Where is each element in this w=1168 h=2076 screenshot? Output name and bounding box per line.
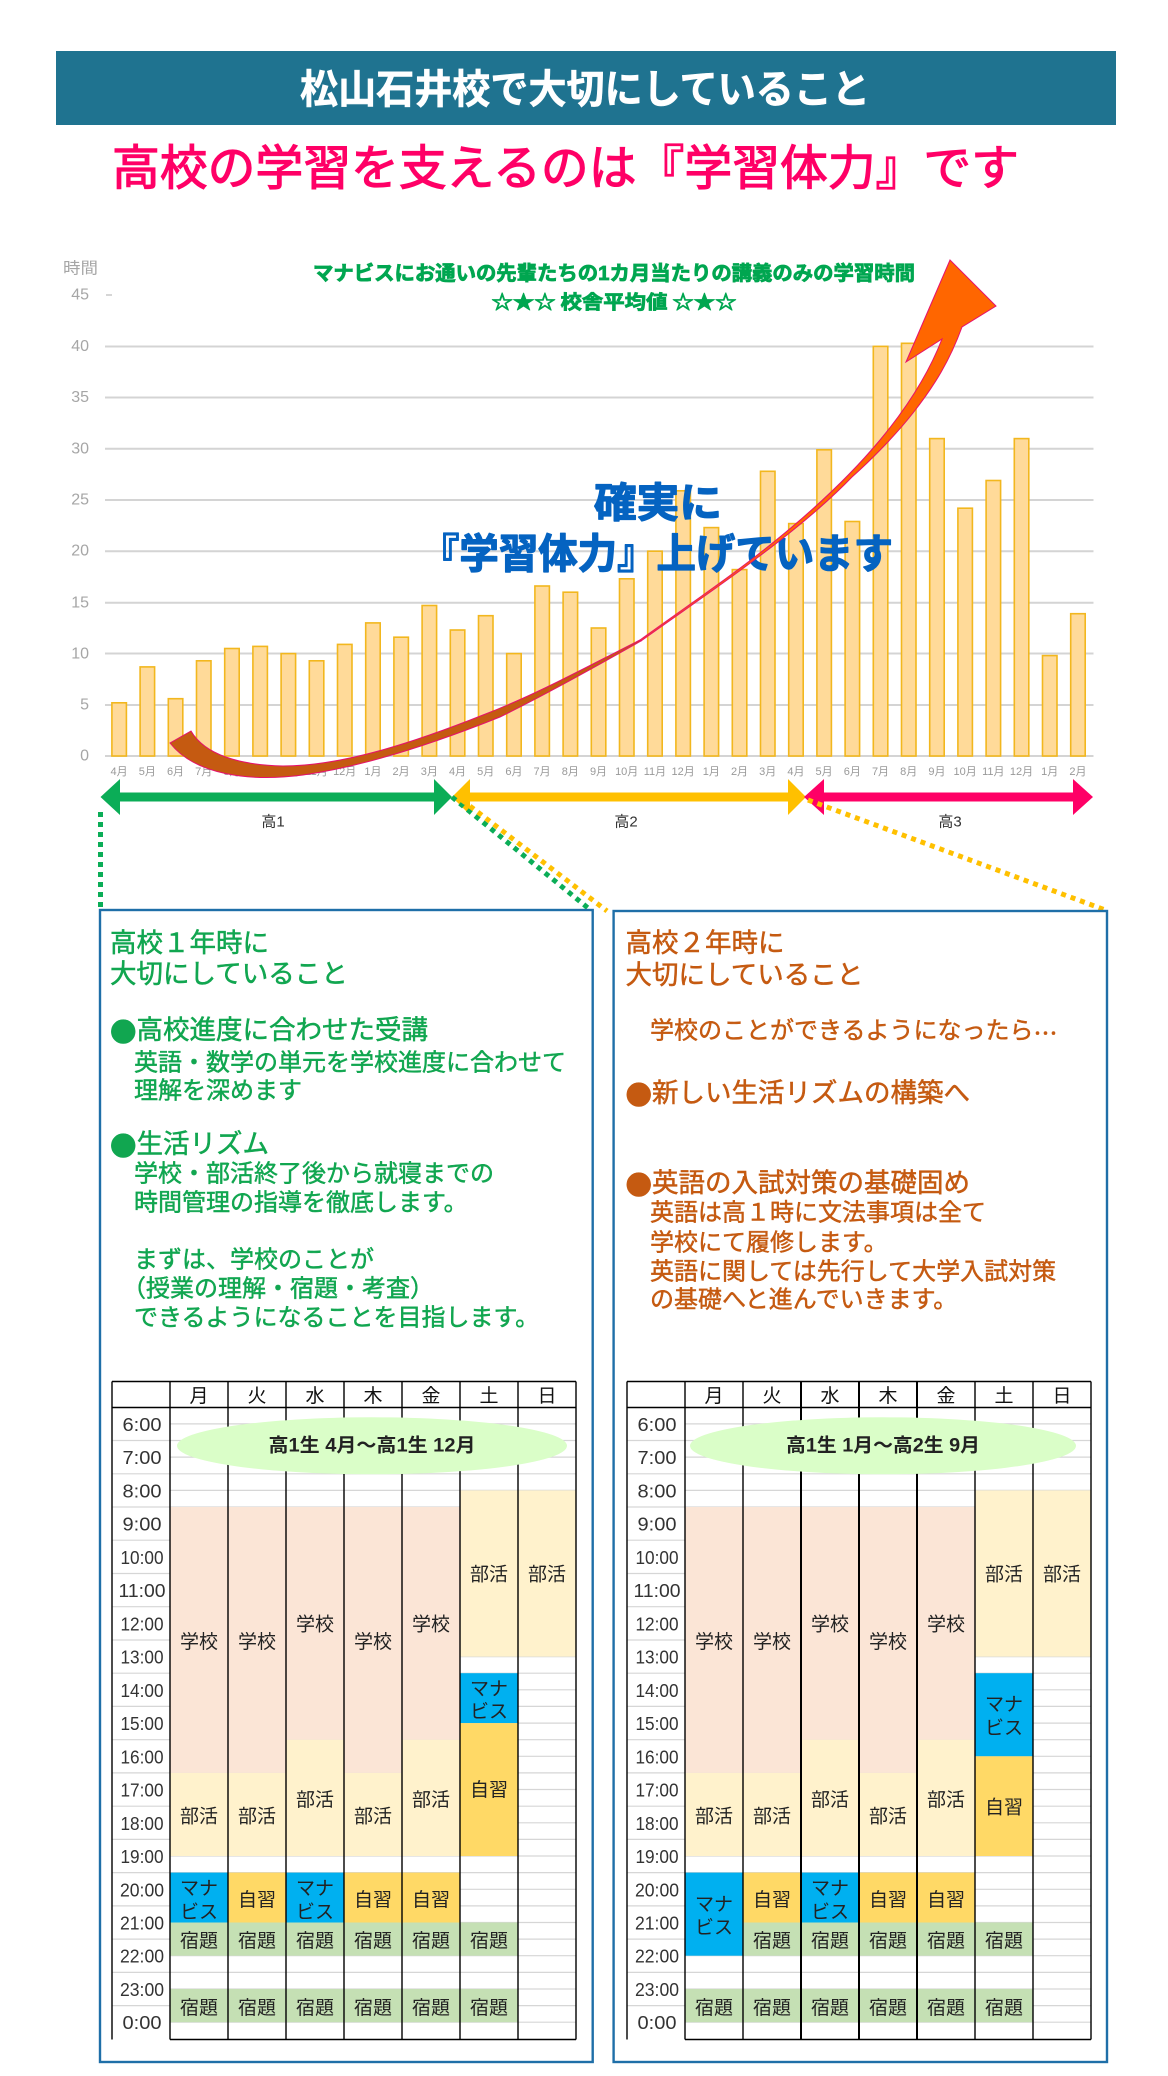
text block: 英語の入試対策の基礎固め: の基礎へと進んでいきます。 bbox=[650, 1286, 957, 1314]
month labels: 1月 bbox=[1041, 766, 1058, 778]
time labels: 0:00 bbox=[638, 2013, 676, 2033]
time labels: 19:00 bbox=[120, 1847, 164, 1867]
weekday header: 土 bbox=[994, 1385, 1014, 1407]
text block: first goal: まずは、学校のことが bbox=[134, 1246, 374, 1274]
schedule labels: 学校 bbox=[695, 1631, 733, 1653]
arrow: 高2 period: 高2 bbox=[614, 814, 638, 830]
time labels: 21:00 bbox=[635, 1914, 679, 1934]
month labels: 3月 bbox=[421, 766, 438, 778]
schedule labels: 部活 bbox=[238, 1806, 276, 1828]
chart title: ☆★☆ 校舎平均値 ☆★☆ bbox=[492, 288, 736, 314]
month labels: 1月 bbox=[364, 766, 381, 778]
weekday header: 日 bbox=[537, 1386, 557, 1407]
time labels: 16:00 bbox=[636, 1747, 678, 1767]
text block: 英語の入試対策の基礎固め: 英語に関しては先行して大学入試対策 bbox=[650, 1258, 1056, 1286]
text block: 生活リズム: 時間管理の指導を徹底します。 bbox=[134, 1190, 468, 1216]
text block: 英語の入試対策の基礎固め: 学校にて履修します。 bbox=[650, 1230, 888, 1256]
text block: first goal: （授業の理解・宿題・考査） bbox=[122, 1276, 434, 1302]
schedule labels: 宿題 bbox=[811, 1930, 849, 1952]
y axis labels: 10 bbox=[71, 646, 89, 662]
weekday header bbox=[189, 1385, 557, 1407]
month labels: 12月 bbox=[1010, 766, 1033, 778]
time labels bbox=[634, 1415, 680, 2033]
month labels: 9月 bbox=[928, 766, 945, 778]
time labels: 7:00 bbox=[638, 1448, 676, 1468]
month labels: 8月 bbox=[223, 766, 240, 778]
schedule labels: 部活 bbox=[412, 1789, 450, 1811]
time labels: 8:00 bbox=[122, 1481, 162, 1501]
time labels: 6:00 bbox=[638, 1415, 676, 1435]
schedule labels: 宿題 bbox=[927, 1930, 965, 1952]
schedule labels: 宿題 bbox=[927, 1997, 965, 2019]
callout: growth message bbox=[420, 480, 893, 577]
schedule labels: 部活 bbox=[354, 1806, 392, 1828]
schedule labels: 学校 bbox=[354, 1631, 392, 1653]
schedule labels: 宿題 bbox=[238, 1930, 276, 1952]
weekday header: 金 bbox=[936, 1385, 956, 1407]
text block: first goal: できるようになることを目指します。 bbox=[134, 1304, 539, 1332]
time labels bbox=[118, 1415, 166, 2033]
schedule labels: 宿題 bbox=[354, 1997, 392, 2019]
panel: 高校2年時 bbox=[614, 911, 1107, 2062]
weekday header: 火 bbox=[762, 1386, 782, 1407]
heading: 高校1年時に大切にしていること: 高校１年時に bbox=[110, 928, 269, 958]
month labels: 12月 bbox=[333, 766, 356, 778]
schedule labels: 自習 bbox=[927, 1889, 965, 1911]
weekday header: 木 bbox=[878, 1385, 898, 1407]
schedule labels: ビス bbox=[470, 1701, 508, 1723]
schedule labels: 宿題 bbox=[753, 1997, 791, 2019]
schedule labels: 学校 bbox=[412, 1614, 450, 1636]
schedule labels: 部活 bbox=[985, 1564, 1023, 1586]
time labels: 21:00 bbox=[120, 1914, 164, 1934]
schedule labels: 学校 bbox=[869, 1631, 907, 1653]
weekday header: 水 bbox=[305, 1385, 325, 1407]
time labels: 20:00 bbox=[635, 1880, 679, 1900]
schedule labels: 学校 bbox=[753, 1631, 791, 1653]
weekday header bbox=[704, 1385, 1072, 1407]
schedule labels: 学校 bbox=[296, 1614, 334, 1636]
bars bbox=[112, 343, 1085, 756]
month labels: 2月 bbox=[731, 766, 748, 778]
schedule labels: 自習 bbox=[470, 1779, 508, 1801]
heading: 高校1年時に大切にしていること bbox=[110, 928, 348, 989]
month labels: 3月 bbox=[759, 766, 776, 778]
schedule labels: 部活 bbox=[927, 1789, 965, 1811]
schedule labels: 部活 bbox=[695, 1806, 733, 1828]
schedule labels: 学校 bbox=[927, 1614, 965, 1636]
time labels: 23:00 bbox=[635, 1980, 679, 2000]
arrow: 高2 period bbox=[452, 779, 806, 830]
y axis labels: 30 bbox=[71, 440, 89, 458]
schedule labels: 部活 bbox=[470, 1564, 508, 1586]
schedule labels: 部活 bbox=[528, 1564, 566, 1586]
schedule labels: 宿題 bbox=[869, 1997, 907, 2019]
time labels: 11:00 bbox=[118, 1581, 166, 1601]
schedule labels: マナ bbox=[985, 1694, 1023, 1715]
month labels: 7月 bbox=[195, 766, 212, 778]
month labels: 8月 bbox=[562, 766, 579, 778]
month labels: 4月 bbox=[449, 766, 466, 778]
time labels: 15:00 bbox=[636, 1714, 678, 1734]
schedule labels: 宿題 bbox=[354, 1930, 392, 1952]
month labels: 10月 bbox=[615, 766, 638, 778]
month labels: 10月 bbox=[277, 766, 300, 778]
weekday header: 木 bbox=[363, 1385, 383, 1407]
subtitle: 高校の学習を支えるのは『学習体力』です bbox=[112, 142, 1019, 196]
month labels: 2月 bbox=[1069, 766, 1086, 778]
schedule labels: 自習 bbox=[354, 1889, 392, 1911]
time labels: 14:00 bbox=[120, 1681, 164, 1701]
month labels: 6月 bbox=[167, 766, 184, 778]
time labels: 9:00 bbox=[638, 1515, 676, 1535]
text block: 生活リズム: ●生活リズム bbox=[110, 1124, 269, 1164]
text block: 英語の入試対策の基礎固め: 英語は高１時に文法事項は全て bbox=[650, 1200, 986, 1226]
time labels: 12:00 bbox=[120, 1614, 164, 1634]
y axis labels: 35 bbox=[71, 389, 89, 406]
heading: 高校2年時に大切にしていること bbox=[626, 928, 863, 990]
weekday header: 水 bbox=[820, 1385, 840, 1407]
schedule labels: 自習 bbox=[238, 1889, 276, 1911]
text block: 高校進度に合わせた受講: 英語・数学の単元を学校進度に合わせて bbox=[134, 1050, 566, 1076]
month labels: 6月 bbox=[844, 766, 861, 778]
schedule labels: ビス bbox=[695, 1917, 733, 1939]
chart title bbox=[313, 262, 915, 314]
month labels: 4月 bbox=[787, 766, 804, 778]
time labels: 11:00 bbox=[634, 1581, 680, 1601]
chart title: マナビスにお通いの先輩たちの1カ月当たりの講義のみの学習時間 bbox=[313, 262, 915, 285]
schedule labels: マナ bbox=[695, 1894, 733, 1915]
month labels: 8月 bbox=[900, 766, 917, 778]
weekday header: 月 bbox=[704, 1386, 724, 1407]
time labels: 8:00 bbox=[638, 1481, 676, 1501]
time labels: 23:00 bbox=[120, 1980, 164, 2000]
schedule labels: 部活 bbox=[296, 1789, 334, 1811]
schedule labels: 宿題 bbox=[811, 1997, 849, 2019]
schedule labels: 部活 bbox=[811, 1789, 849, 1811]
text block: 高校進度に合わせた受講: ●高校進度に合わせた受講 bbox=[110, 1010, 428, 1050]
month labels: 2月 bbox=[393, 766, 410, 778]
time labels: 7:00 bbox=[122, 1448, 162, 1468]
time labels: 13:00 bbox=[120, 1648, 164, 1668]
text block: 新しい生活リズムの構築へ: ●新しい生活リズムの構築へ bbox=[626, 1074, 970, 1112]
schedule labels: 学校 bbox=[811, 1614, 849, 1636]
schedule labels: 宿題 bbox=[470, 1930, 508, 1952]
timetable: 高1 bbox=[112, 1382, 576, 2040]
text block: 高校進度に合わせた受講 bbox=[110, 1010, 566, 1104]
month labels: 7月 bbox=[872, 766, 889, 778]
time labels: 10:00 bbox=[636, 1548, 678, 1568]
time labels: 15:00 bbox=[120, 1714, 164, 1734]
schedule labels: 宿題 bbox=[412, 1930, 450, 1952]
month labels: 1月 bbox=[703, 766, 720, 778]
schedule labels: 自習 bbox=[412, 1889, 450, 1911]
schedule labels: ビス bbox=[180, 1901, 218, 1923]
weekday header: 火 bbox=[247, 1386, 267, 1407]
time labels: 16:00 bbox=[120, 1747, 164, 1767]
month labels: 5月 bbox=[816, 766, 833, 778]
y axis labels: 20 bbox=[71, 542, 89, 560]
time labels: 18:00 bbox=[636, 1814, 678, 1834]
schedule labels: 宿題 bbox=[869, 1930, 907, 1952]
month labels: 9月 bbox=[252, 766, 269, 778]
schedule labels: 宿題 bbox=[695, 1997, 733, 2019]
callout: growth message: 『学習体力』上げています bbox=[420, 531, 893, 577]
period badge: 高1生 4月～高1生 12月 bbox=[268, 1434, 476, 1456]
schedule labels: 部活 bbox=[869, 1806, 907, 1828]
period badge bbox=[690, 1417, 1076, 1474]
schedule labels bbox=[180, 1564, 566, 2019]
panel: 高校1年時 bbox=[100, 910, 593, 2062]
y axis labels bbox=[63, 260, 98, 764]
schedule labels: マナ bbox=[180, 1878, 218, 1899]
text block: first goal bbox=[122, 1246, 539, 1332]
month labels: 4月 bbox=[111, 766, 128, 778]
month labels: 11月 bbox=[305, 766, 328, 778]
schedule labels: 自習 bbox=[985, 1797, 1023, 1819]
y axis labels: 0 bbox=[80, 748, 89, 764]
month labels bbox=[111, 766, 1086, 778]
schedule labels: 宿題 bbox=[985, 1997, 1023, 2019]
arrow: 高3 period: 高3 bbox=[938, 814, 962, 830]
y axis labels: 25 bbox=[71, 492, 89, 508]
schedule labels: 宿題 bbox=[296, 1930, 334, 1952]
y axis labels: 5 bbox=[80, 696, 89, 714]
arrow: 高1 period bbox=[100, 779, 452, 830]
timetable: 高1後半から高2 bbox=[627, 1382, 1091, 2040]
weekday header: 金 bbox=[421, 1385, 441, 1407]
text block: 英語の入試対策の基礎固め bbox=[626, 1164, 1056, 1314]
y axis labels: 時間 bbox=[63, 260, 98, 278]
time labels: 9:00 bbox=[122, 1515, 162, 1535]
schedule labels: ビス bbox=[811, 1901, 849, 1923]
time labels: 22:00 bbox=[120, 1947, 164, 1967]
time labels: 22:00 bbox=[635, 1947, 679, 1967]
schedule labels: 自習 bbox=[753, 1889, 791, 1911]
schedule labels: ビス bbox=[985, 1717, 1023, 1739]
bar chart: monthly study hours bbox=[63, 260, 1094, 778]
time labels: 17:00 bbox=[120, 1780, 164, 1800]
schedule labels: 宿題 bbox=[985, 1930, 1023, 1952]
schedule labels: 宿題 bbox=[296, 1997, 334, 2019]
arrow: 高3 period bbox=[804, 779, 1093, 830]
month labels: 9月 bbox=[590, 766, 607, 778]
period badge: 高1生 1月～高2生 9月 bbox=[786, 1434, 980, 1456]
schedule labels: 自習 bbox=[869, 1889, 907, 1911]
schedule labels: 部活 bbox=[180, 1806, 218, 1828]
weekday header: 土 bbox=[479, 1385, 499, 1407]
schedule labels: 宿題 bbox=[470, 1997, 508, 2019]
schedule labels: 部活 bbox=[753, 1806, 791, 1828]
heading: 高校2年時に大切にしていること: 大切にしていること bbox=[626, 960, 863, 990]
schedule labels: 宿題 bbox=[412, 1997, 450, 2019]
weekday header: 日 bbox=[1052, 1386, 1072, 1407]
time labels: 12:00 bbox=[636, 1614, 678, 1634]
month labels: 12月 bbox=[671, 766, 695, 778]
schedule labels: マナ bbox=[811, 1878, 849, 1899]
schedule labels: 宿題 bbox=[238, 1997, 276, 2019]
y axis labels: 45 bbox=[71, 286, 89, 304]
month labels: 11月 bbox=[644, 766, 666, 778]
callout: growth message: 確実に bbox=[594, 480, 722, 526]
schedule labels: 宿題 bbox=[180, 1997, 218, 2019]
time labels: 19:00 bbox=[636, 1847, 678, 1867]
schedule labels: マナ bbox=[470, 1679, 508, 1700]
schedule labels: ビス bbox=[296, 1901, 334, 1923]
month labels: 7月 bbox=[534, 766, 551, 778]
schedule labels: 宿題 bbox=[753, 1930, 791, 1952]
banner: 松山石井校で大切にしていること bbox=[300, 68, 870, 112]
arrow: 高1 period: 高1 bbox=[261, 814, 285, 830]
time labels: 0:00 bbox=[122, 2013, 162, 2033]
time labels: 10:00 bbox=[120, 1548, 164, 1568]
schedule labels: 学校 bbox=[180, 1631, 218, 1653]
text block: 生活リズム bbox=[110, 1124, 494, 1216]
weekday header: 月 bbox=[189, 1386, 209, 1407]
connector: dotted lines to panels bbox=[100, 797, 1108, 911]
heading: 高校1年時に大切にしていること: 大切にしていること bbox=[110, 959, 348, 989]
period badge bbox=[177, 1417, 567, 1474]
time labels: 14:00 bbox=[636, 1681, 678, 1701]
month labels: 5月 bbox=[139, 766, 156, 778]
schedule labels bbox=[695, 1564, 1081, 2019]
time labels: 6:00 bbox=[122, 1415, 162, 1435]
arrow: upward growth curve bbox=[170, 260, 996, 777]
time labels: 20:00 bbox=[120, 1880, 164, 1900]
time labels: 18:00 bbox=[120, 1814, 164, 1834]
month labels: 6月 bbox=[505, 766, 522, 778]
text block: 高校進度に合わせた受講: 理解を深めます bbox=[134, 1078, 302, 1104]
text block: 英語の入試対策の基礎固め: ●英語の入試対策の基礎固め bbox=[626, 1164, 970, 1202]
month labels: 10月 bbox=[953, 766, 977, 778]
schedule blocks bbox=[170, 1490, 576, 2022]
schedule labels: マナ bbox=[296, 1878, 334, 1899]
y axis labels: 40 bbox=[71, 338, 89, 355]
month labels: 11月 bbox=[982, 766, 1005, 778]
y axis labels: 15 bbox=[71, 594, 89, 612]
schedule labels: 宿題 bbox=[180, 1930, 218, 1952]
banner bbox=[56, 51, 1116, 125]
heading: 高校2年時に大切にしていること: 高校２年時に bbox=[626, 928, 784, 958]
time labels: 13:00 bbox=[636, 1648, 678, 1668]
text block: 学校のことができるようになったら: 学校のことができるようになったら… bbox=[650, 1014, 1058, 1048]
schedule labels: 部活 bbox=[1043, 1564, 1081, 1586]
time labels: 17:00 bbox=[636, 1780, 678, 1800]
schedule labels: 学校 bbox=[238, 1631, 276, 1653]
schedule blocks bbox=[685, 1490, 1091, 2022]
month labels: 5月 bbox=[477, 766, 494, 778]
text block: 生活リズム: 学校・部活終了後から就寝までの bbox=[134, 1160, 494, 1188]
